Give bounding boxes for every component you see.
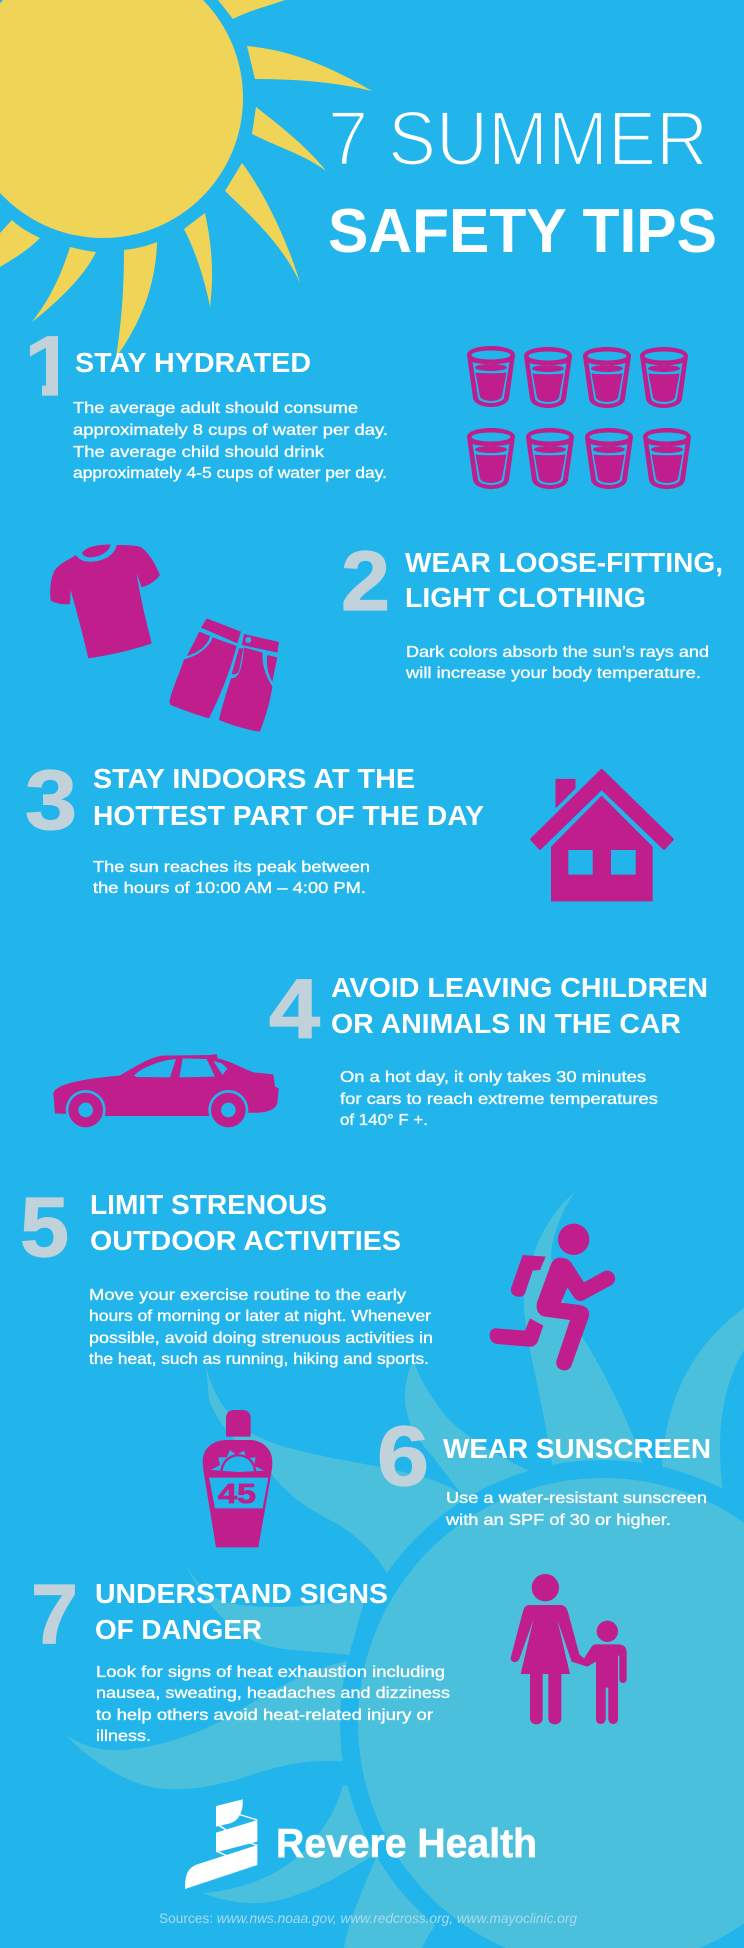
heading: STAY INDOORS AT THE bbox=[93, 763, 415, 794]
number 6: 6 bbox=[377, 1409, 429, 1503]
number 4: 4 bbox=[269, 962, 320, 1056]
heading: OR ANIMALS IN THE CAR bbox=[331, 1008, 681, 1039]
body text: On a hot day, it only takes 30 minutes bbox=[340, 1069, 646, 1086]
heading: OUTDOOR ACTIVITIES bbox=[90, 1225, 401, 1256]
icon: eight glasses of water bbox=[467, 346, 691, 489]
body text: Dark colors absorb the sun’s rays and bbox=[406, 644, 709, 661]
panel: tip 3 indoors bbox=[25, 753, 484, 897]
body text: will increase your body temperature. bbox=[405, 665, 701, 682]
heading: LIGHT CLOTHING bbox=[405, 582, 646, 613]
heading: WEAR LOOSE-FITTING, bbox=[405, 547, 723, 578]
title: 7 SUMMER bbox=[328, 96, 708, 182]
body text: the heat, such as running, hiking and sports. bbox=[89, 1351, 429, 1368]
panel: tip 6 sunscreen bbox=[377, 1409, 711, 1529]
heading: OF DANGER bbox=[95, 1614, 262, 1645]
body text bbox=[93, 859, 370, 897]
number 2: 2 bbox=[341, 534, 390, 628]
heading: LIMIT STRENOUS bbox=[90, 1189, 327, 1220]
sources footer: Sources: www.nws.noaa.gov, www.redcross.org, www.mayoclinic.org bbox=[159, 1910, 577, 1926]
body text: Use a water-resistant sunscreen bbox=[446, 1490, 707, 1507]
heading bbox=[405, 547, 723, 613]
body text: The average adult should consume bbox=[73, 400, 358, 417]
number 7: 7 bbox=[31, 1567, 78, 1661]
body text bbox=[405, 644, 709, 682]
body text: approximately 4-5 cups of water per day. bbox=[73, 465, 387, 482]
logo mark bbox=[185, 1799, 257, 1889]
heading: AVOID LEAVING CHILDREN bbox=[331, 972, 708, 1003]
body text: nausea, sweating, headaches and dizziness bbox=[96, 1685, 450, 1702]
body text: for cars to reach extreme temperatures bbox=[340, 1091, 658, 1108]
body text: The sun reaches its peak between bbox=[93, 859, 370, 876]
logo wordmark: Revere Health bbox=[276, 1820, 537, 1866]
body text: Move your exercise routine to the early bbox=[89, 1287, 406, 1304]
title bbox=[328, 96, 717, 266]
icon: car bbox=[53, 1054, 279, 1130]
icon: t-shirt and shorts bbox=[50, 545, 279, 732]
body text: of 140° F +. bbox=[340, 1112, 428, 1129]
body text: possible, avoid doing strenuous activities in bbox=[89, 1330, 433, 1347]
body text bbox=[340, 1069, 658, 1129]
heading bbox=[331, 972, 708, 1039]
body text: with an SPF of 30 or higher. bbox=[445, 1512, 671, 1529]
heading bbox=[93, 763, 484, 831]
panel: tip 7 danger signs bbox=[31, 1567, 450, 1745]
panel: tip 2 clothing bbox=[341, 534, 723, 682]
body text: Look for signs of heat exhaustion including bbox=[96, 1664, 445, 1681]
heading: UNDERSTAND SIGNS bbox=[95, 1578, 388, 1609]
body text bbox=[96, 1664, 450, 1745]
number 1: 1 bbox=[24, 319, 78, 413]
sun bbox=[0, 0, 372, 357]
body text: to help others avoid heat-related injury or bbox=[96, 1707, 434, 1724]
icon: runner bbox=[490, 1224, 615, 1370]
number 5: 5 bbox=[20, 1180, 69, 1274]
heading: HOTTEST PART OF THE DAY bbox=[93, 800, 484, 831]
body text: The average child should drink bbox=[73, 444, 325, 461]
icon: house bbox=[532, 771, 672, 901]
body text: approximately 8 cups of water per day. bbox=[73, 422, 388, 439]
body text: illness. bbox=[96, 1728, 151, 1745]
heading: WEAR SUNSCREEN bbox=[443, 1433, 711, 1464]
icon: sunscreen bottle: 45 bbox=[218, 1478, 256, 1509]
body text: the hours of 10:00 AM – 4:00 PM. bbox=[93, 880, 366, 897]
panel: tip 4 car bbox=[269, 962, 708, 1129]
heading bbox=[90, 1189, 401, 1256]
background: pale sun bbox=[66, 1192, 744, 1948]
body text: hours of morning or later at night. Whenever bbox=[89, 1308, 432, 1325]
body text bbox=[89, 1287, 433, 1368]
title: SAFETY TIPS bbox=[328, 197, 717, 266]
heading bbox=[95, 1578, 388, 1645]
body text bbox=[73, 400, 388, 482]
number 3: 3 bbox=[25, 753, 77, 847]
panel: tip 1 stay hydrated bbox=[30, 336, 387, 482]
heading: STAY HYDRATED bbox=[75, 347, 311, 378]
panel: tip 5 activities bbox=[20, 1180, 433, 1368]
body text bbox=[445, 1490, 707, 1529]
logo: Revere Health bbox=[185, 1799, 537, 1889]
icon: sunscreen bottle bbox=[203, 1410, 272, 1547]
icon: mother and child bbox=[511, 1574, 627, 1724]
